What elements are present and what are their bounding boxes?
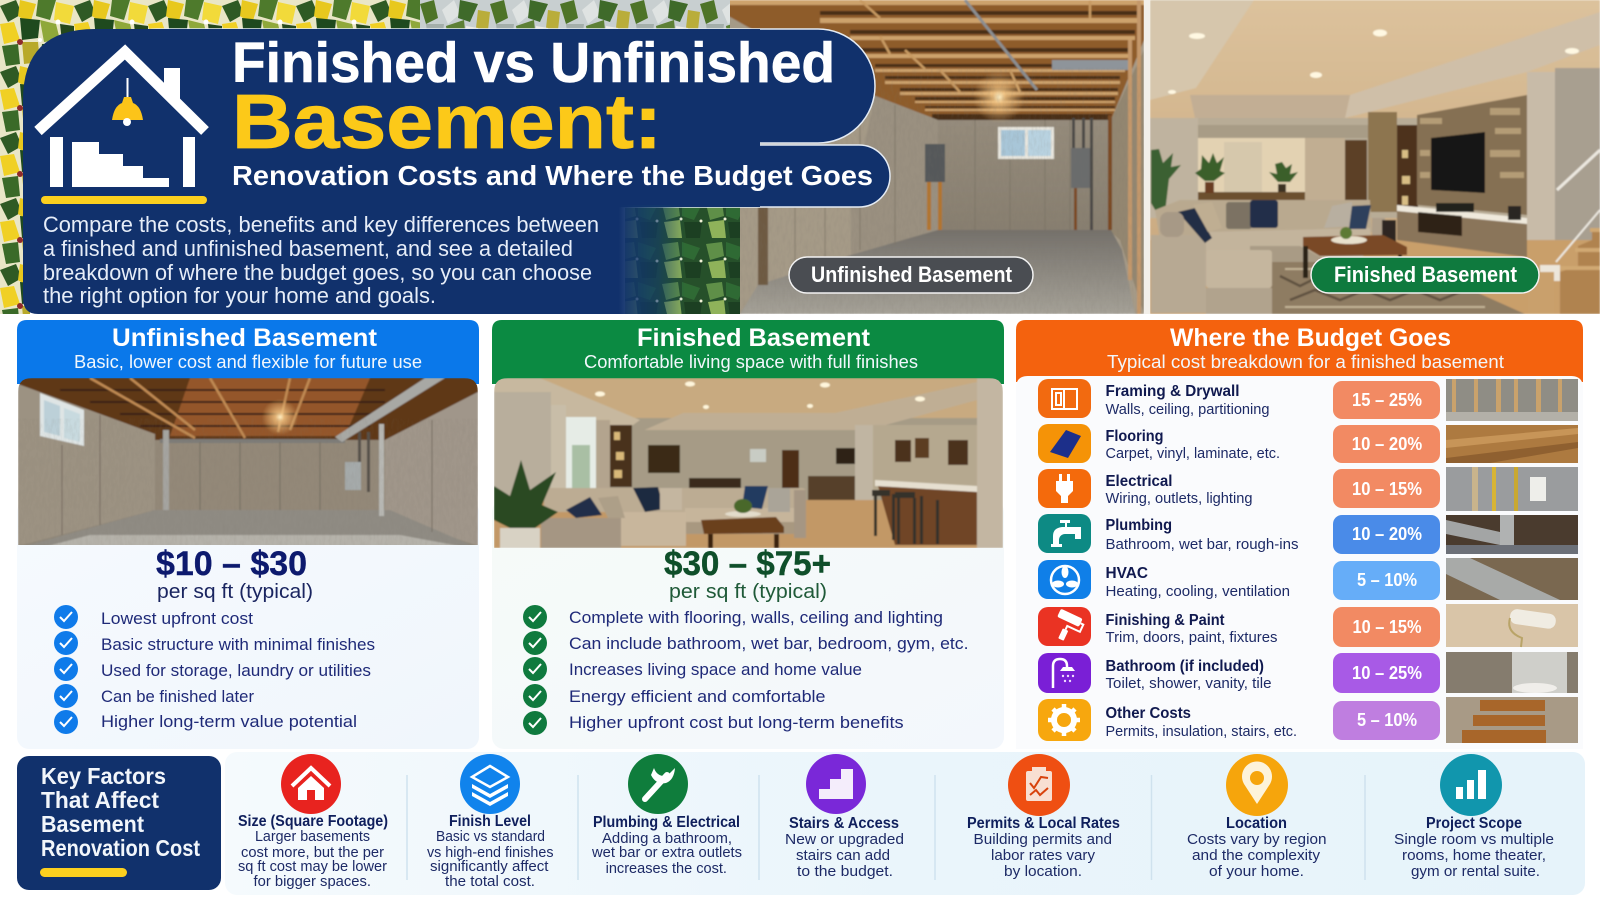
row: other costs: Permits, insulation, stairs, etc. — [1106, 724, 1297, 740]
title — [232, 31, 873, 191]
row: framing and drywall: Walls, ceiling, partitioning — [1106, 402, 1270, 418]
band: key factors — [17, 752, 1585, 895]
factor: size: Size (Square Footage) — [238, 813, 388, 830]
checklist: Can include bathroom, wet bar, bedroom, gym, etc. — [569, 634, 968, 653]
row: hvac: 5 – 10% — [1357, 570, 1417, 590]
row: framing and drywall: 15 – 25% — [1352, 390, 1422, 410]
heading: key factors: Basement — [41, 811, 144, 837]
checklist: Complete with flooring, walls, ceiling and lighting — [569, 608, 943, 627]
row: hvac — [1038, 558, 1578, 600]
row: other costs: Other Costs — [1106, 705, 1191, 722]
factor: permits and local rates: labor rates vary — [991, 848, 1096, 864]
row: bathroom: 10 – 25% — [1352, 663, 1422, 683]
title: Finished vs Unfinished — [232, 31, 835, 95]
row: plumbing — [1038, 514, 1578, 554]
checklist: Energy efficient and comfortable — [569, 687, 826, 706]
factor: size: for bigger spaces. — [254, 874, 371, 890]
row: finishing and paint: Finishing & Paint — [1106, 612, 1224, 629]
hero banner — [0, 0, 1600, 314]
row: finishing and paint: Trim, doors, paint, fixtures — [1106, 630, 1278, 646]
row: finishing and paint: 10 – 15% — [1352, 617, 1422, 637]
factor: stairs and access: Stairs & Access — [789, 815, 899, 832]
factor: stairs and access — [785, 754, 904, 880]
checklist: Basic structure with minimal finishes — [101, 635, 375, 654]
panel header — [492, 320, 1004, 384]
navy title panel — [23, 29, 890, 314]
factor: location: Costs vary by region — [1187, 832, 1326, 848]
panel: finished basement — [492, 320, 1004, 749]
row: other costs — [1038, 697, 1578, 743]
factor: size: Larger basements — [255, 829, 370, 845]
factor: plumbing and electrical — [591, 754, 742, 877]
factor: permits and local rates: by location. — [1004, 864, 1082, 880]
factor: permits and local rates — [967, 754, 1120, 880]
row: bathroom: Bathroom (if included) — [1106, 658, 1264, 675]
price — [156, 545, 313, 603]
factor: project scope: rooms, home theater, — [1402, 848, 1546, 864]
intro text: the right option for your home and goals. — [43, 283, 436, 308]
row: electrical: 10 – 15% — [1352, 479, 1422, 499]
factor: finish level — [427, 754, 554, 890]
panel body — [1016, 376, 1583, 749]
panel header — [17, 320, 479, 384]
factor: finish level: Finish Level — [449, 813, 531, 830]
factor: location: of your home. — [1209, 864, 1304, 880]
checklist: Higher long-term value potential — [101, 712, 357, 731]
factor: project scope: Single room vs multiple — [1394, 832, 1554, 848]
label: unfinished basement — [789, 257, 1033, 293]
panel: where the budget goes — [1016, 320, 1583, 749]
checklist: Can be finished later — [101, 687, 254, 706]
heading: key factors: Renovation Cost — [41, 835, 200, 861]
intro text: breakdown of where the budget goes, so you can choose — [43, 260, 592, 285]
row: other costs: 5 – 10% — [1357, 710, 1417, 730]
price: per sq ft (typical) — [157, 581, 313, 603]
title: Basement: — [232, 79, 662, 165]
panel header: Basic, lower cost and flexible for future use — [74, 352, 422, 372]
factor: finish level: significantly affect — [430, 859, 548, 875]
row: flooring: 10 – 20% — [1352, 434, 1422, 454]
factor: plumbing and electrical: Plumbing & Electrical — [593, 814, 740, 831]
price: per sq ft (typical) — [669, 581, 827, 603]
heading: key factors — [17, 756, 221, 890]
intro text: Compare the costs, benefits and key differences between — [43, 212, 599, 237]
factor: plumbing and electrical: increases the cost. — [606, 861, 727, 877]
row: flooring: Carpet, vinyl, laminate, etc. — [1106, 446, 1280, 462]
photo: unfinished basement — [730, 0, 1144, 314]
panel header: Unfinished Basement — [112, 324, 378, 352]
row: plumbing: 10 – 20% — [1352, 524, 1422, 544]
row: flooring — [1038, 424, 1578, 463]
factor: project scope: Project Scope — [1426, 815, 1522, 832]
price: $10 – $30 — [156, 545, 307, 583]
label: unfinished basement: Unfinished Basement — [811, 262, 1013, 287]
row: framing and drywall: Framing & Drywall — [1106, 383, 1240, 400]
panel header: Where the Budget Goes — [1170, 324, 1451, 352]
row: hvac: HVAC — [1106, 565, 1148, 582]
factor: project scope: gym or rental suite. — [1411, 864, 1540, 880]
price: $30 – $75+ — [664, 545, 831, 583]
row: electrical — [1038, 467, 1578, 511]
row: plumbing: Plumbing — [1106, 517, 1172, 534]
intro text: a finished and unfinished basement, and see a detailed — [43, 236, 573, 261]
panel header — [1016, 320, 1583, 382]
factor: stairs and access: New or upgraded — [785, 832, 904, 848]
row: electrical: Electrical — [1106, 473, 1172, 490]
factor: plumbing and electrical: Adding a bathroom, — [602, 831, 732, 847]
factor: size: sq ft cost may be lower — [238, 859, 387, 875]
price — [664, 545, 831, 603]
label: finished basement: Finished Basement — [1334, 262, 1518, 287]
icon: house with stairs and lamp — [38, 52, 207, 204]
row: electrical: Wiring, outlets, lighting — [1106, 491, 1252, 507]
divider between photos — [1144, 0, 1150, 314]
factor: finish level: the total cost. — [445, 874, 535, 890]
factor: finish level: Basic vs standard — [436, 829, 545, 845]
row: hvac: Heating, cooling, ventilation — [1106, 584, 1290, 600]
panel body — [17, 500, 479, 749]
factor: project scope — [1394, 754, 1554, 880]
intro text — [43, 212, 599, 308]
row: flooring: Flooring — [1106, 428, 1164, 445]
factor: stairs and access: to the budget. — [797, 864, 893, 880]
factor: size: cost more, but the per — [241, 845, 384, 861]
factor: location — [1187, 754, 1326, 880]
row: plumbing: Bathroom, wet bar, rough-ins — [1106, 537, 1298, 553]
label: finished basement — [1311, 257, 1539, 293]
row: bathroom: Toilet, shower, vanity, tile — [1106, 676, 1272, 692]
checklist: Increases living space and home value — [569, 660, 862, 679]
row: finishing and paint — [1038, 604, 1578, 647]
photo: finished basement — [1150, 0, 1600, 314]
checklist — [523, 605, 968, 735]
factor: permits and local rates: Permits & Local Rates — [967, 815, 1120, 832]
photo: finished living room — [494, 378, 1003, 548]
foliage border — [0, 0, 740, 314]
checklist: Used for storage, laundry or utilities — [101, 661, 371, 680]
factor: location: and the complexity — [1192, 848, 1321, 864]
panel body — [492, 500, 1004, 749]
row: framing and drywall — [1038, 379, 1578, 421]
heading: key factors: That Affect — [41, 787, 159, 813]
panel header: Finished Basement — [637, 324, 871, 352]
panel: unfinished basement — [17, 320, 479, 749]
row: bathroom — [1038, 652, 1578, 693]
factor: finish level: vs high-end finishes — [427, 845, 554, 861]
photo: empty unfinished basement — [18, 378, 478, 548]
heading: key factors: Key Factors — [41, 763, 166, 789]
factor: size — [238, 754, 388, 890]
panel header: Comfortable living space with full finishes — [584, 352, 918, 372]
checklist — [54, 605, 375, 734]
title: Renovation Costs and Where the Budget Goes — [232, 160, 873, 191]
factor: location: Location — [1226, 815, 1287, 832]
checklist: Lowest upfront cost — [101, 609, 253, 628]
panel header: Typical cost breakdown for a finished basement — [1107, 352, 1504, 372]
factor: plumbing and electrical: wet bar or extra outlets — [591, 845, 742, 861]
factor: permits and local rates: Building permits and — [974, 832, 1112, 848]
factor: stairs and access: stairs can add — [796, 848, 890, 864]
checklist: Higher upfront cost but long-term benefits — [569, 713, 904, 732]
